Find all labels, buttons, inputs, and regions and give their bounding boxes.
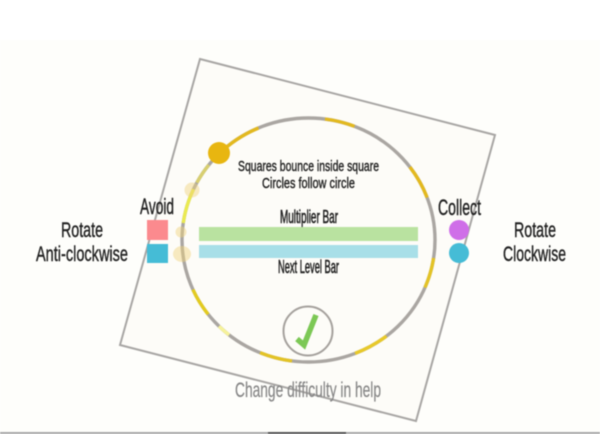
text: change difficulty note: Change difficulty in help [235,379,381,402]
ring: circle track with gold segments [182,118,435,362]
label: collect: Collect [438,195,481,220]
text: rotate clockwise [503,219,566,266]
label: multiplier bar: Multiplier Bar [280,207,338,227]
icon: blue circle [449,243,469,263]
bar: next level [199,245,418,258]
text: rotate anti-clockwise: Rotate [61,219,103,242]
icon: purple circle [449,220,469,240]
bar: multiplier [199,227,418,241]
button: check mark [284,306,332,356]
text: rotate anti-clockwise: Anti-clockwise [36,243,128,266]
text: bounce instructions: Squares bounce inside square [238,158,379,175]
text: rotate clockwise: Rotate [514,219,556,242]
label: next level bar: Next Level Bar [278,257,339,277]
text: rotate clockwise: Clockwise [503,243,566,266]
label: avoid: Avoid [140,194,174,219]
text: rotate anti-clockwise [36,219,128,266]
icon: gold player dot [208,142,230,164]
icon: pink square [147,220,168,240]
icon: faded circles on the ring [173,182,200,262]
text: bounce instructions: Circles follow circle [262,175,355,192]
icon: blue square [147,244,168,263]
panel: rotated square [120,59,495,421]
text: bounce instructions [238,158,379,192]
